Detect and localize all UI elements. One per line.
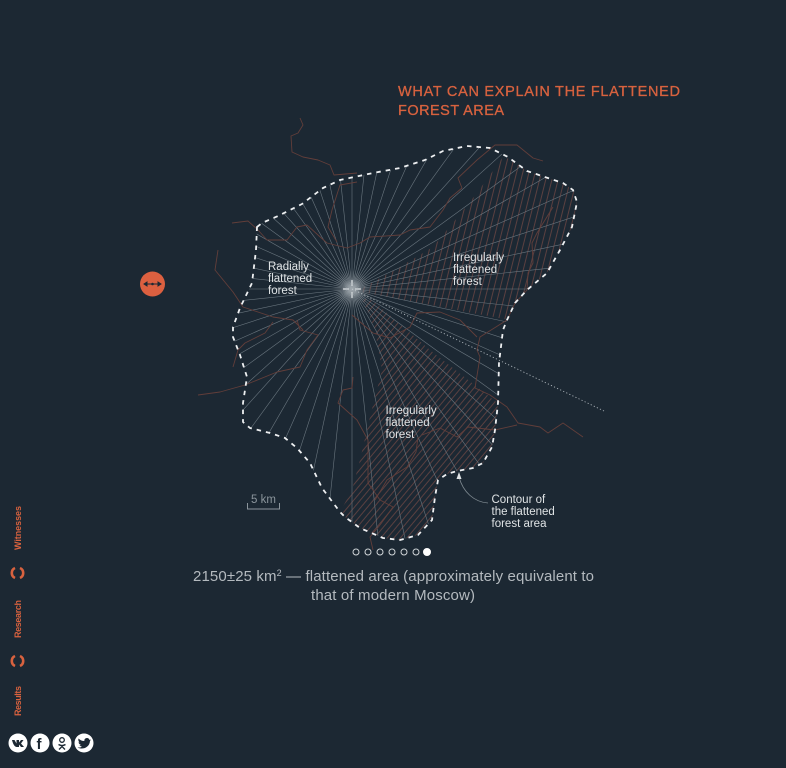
title: FOREST AREA (398, 103, 504, 119)
label: contour of the flattened forest area: Contour of (492, 494, 546, 506)
pagination dots (353, 548, 430, 556)
nav label: research: Research (13, 600, 23, 638)
dashed contour of flattened forest (233, 146, 577, 540)
rivers (198, 118, 583, 550)
label: contour of the flattened forest area: the flattened (492, 506, 555, 518)
caption: — flattened area (approximately equivalent to (282, 568, 594, 585)
orange toggle button (140, 272, 165, 296)
label: irregularly flattened forest south: flattened (386, 417, 430, 429)
title (398, 84, 680, 119)
label: irregularly flattened forest north-east: Irregularly (453, 252, 504, 264)
label: radially flattened forest (268, 261, 312, 297)
label: contour of the flattened forest area (492, 494, 555, 530)
label: irregularly flattened forest north-east (453, 252, 504, 288)
label: radially flattened forest: flattened (268, 273, 312, 285)
scale bar 5 km (248, 494, 280, 509)
scale bar 5 km: 5 km (251, 494, 276, 506)
label: contour of the flattened forest area: forest area (492, 518, 547, 530)
label: irregularly flattened forest north-east: forest (453, 276, 483, 288)
caption: 2 (277, 568, 282, 578)
icon: swap arrows (12, 656, 23, 666)
dotted trajectory line (352, 289, 604, 411)
hatched region: north-east irregularly flattened forest (360, 157, 580, 320)
nav label: witnesses: Witnesses (13, 506, 23, 550)
icon: facebook: f (36, 736, 42, 753)
label: radially flattened forest: forest (268, 285, 298, 297)
radial fallen-tree rays (234, 148, 573, 539)
icon: twitter (74, 734, 94, 752)
label: irregularly flattened forest south: Irregularly (386, 405, 437, 417)
nav label: results: Results (13, 686, 23, 716)
icon: vk (8, 734, 28, 752)
label: radially flattened forest: Radially (268, 261, 309, 273)
caption: that of modern Moscow) (311, 587, 475, 604)
label: irregularly flattened forest south: forest (386, 429, 415, 441)
arrow to contour (456, 472, 488, 503)
caption (193, 568, 594, 604)
hatched region: south irregularly flattened forest (342, 298, 498, 540)
epicentre glow and crosshair (333, 270, 371, 308)
caption: 2150±25 km (193, 568, 277, 585)
infographic canvas (8, 86, 680, 752)
label: irregularly flattened forest south (386, 405, 437, 441)
icon: odnoklassniki (52, 734, 72, 752)
side navigation (12, 506, 23, 716)
icon: swap arrows (12, 568, 23, 578)
title: WHAT CAN EXPLAIN THE FLATTENED (398, 84, 680, 100)
label: irregularly flattened forest north-east: flattened (453, 264, 497, 276)
social icons (8, 734, 94, 753)
